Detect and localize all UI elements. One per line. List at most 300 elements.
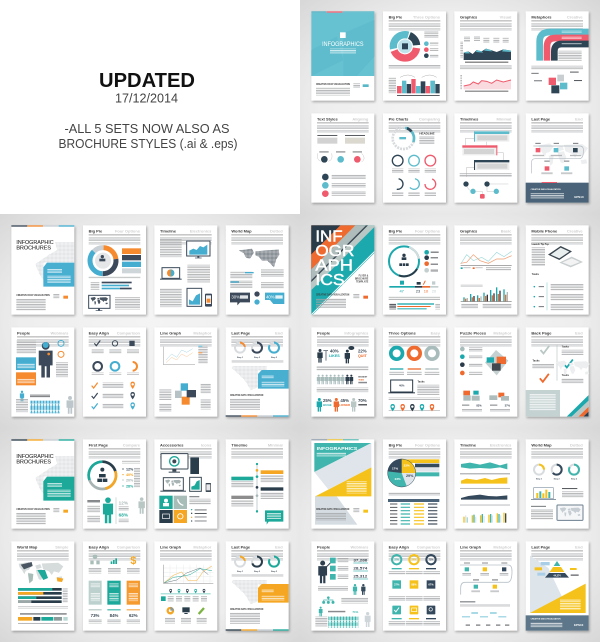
icon tiles <box>159 496 187 523</box>
page: Text Styles <box>311 113 375 204</box>
cover title: INFOGRAPHIC <box>16 240 54 246</box>
step labels: Step 1 <box>237 356 244 359</box>
page title: Line Graph <box>160 545 182 550</box>
background: white update panel <box>0 0 300 214</box>
center icons <box>254 291 260 305</box>
checks and pins <box>92 382 135 410</box>
cover footer heading: CREATIVE DATA VISUALIZATION <box>316 83 350 86</box>
segment bar with numbers: 10 <box>424 289 429 294</box>
page subtitle: End <box>275 331 283 336</box>
people rows: 71% <box>352 610 359 614</box>
page: cover diagonal Infographics: BROCHURE <box>355 278 369 280</box>
page subtitle: Comparing <box>419 117 441 122</box>
number stats <box>353 558 368 579</box>
faint map <box>557 361 590 376</box>
page: Big Pie <box>83 225 147 316</box>
puzzle <box>531 71 582 93</box>
page subtitle: Comparison <box>117 331 141 336</box>
page: Line Graph <box>154 541 218 632</box>
gray text box <box>526 390 560 417</box>
pie chart: 23% <box>395 477 401 481</box>
page subtitle: End <box>575 331 583 336</box>
page: Timeline <box>154 225 218 316</box>
puzzle group right <box>489 393 509 401</box>
tasks text: Tasks <box>417 380 425 384</box>
page title: World Map <box>17 545 38 550</box>
cover title: INFOGRAPHICS <box>322 41 364 48</box>
page title: Line Graph <box>160 331 182 336</box>
line chart <box>163 347 195 365</box>
page: Last Page <box>526 113 590 204</box>
page: Mobile Phone <box>526 225 590 316</box>
ring chart <box>384 241 424 282</box>
number legend: 40% <box>126 473 134 477</box>
page: Back Page <box>526 327 590 418</box>
stats: 83% <box>476 403 482 407</box>
top icons <box>92 340 139 354</box>
page: Line Graph <box>154 327 218 418</box>
data table <box>388 499 439 524</box>
percent stats: 73% <box>91 613 99 618</box>
figure with stats: 68% <box>119 513 129 518</box>
puzzle group left <box>463 391 480 401</box>
bar chart <box>463 513 506 523</box>
electronics devices <box>160 239 212 307</box>
segment bar with numbers: 47 <box>399 289 405 294</box>
line chart <box>460 75 511 92</box>
footer band: EPS10 <box>574 195 584 199</box>
color map <box>19 562 63 583</box>
step labels <box>232 570 283 577</box>
page subtitle: Minimal <box>496 117 511 122</box>
page title: Back Page <box>531 331 552 336</box>
pin row <box>389 404 440 411</box>
page subtitle: Metaphor <box>193 545 212 550</box>
page title: Graphics <box>460 229 478 234</box>
laptop <box>160 478 186 492</box>
curved metaphor bands <box>540 31 589 61</box>
cover footer: CREATIVE DATA VISUALIZATION <box>316 294 350 297</box>
bottom stripe <box>226 629 289 631</box>
blue callout 40%: 40% <box>266 294 275 299</box>
background shapes <box>530 556 586 613</box>
stat: likes: 40% <box>330 349 339 354</box>
ring chart <box>85 458 120 493</box>
biggest team label: TEAM <box>358 379 364 382</box>
donut chart <box>390 31 420 62</box>
page subtitle: Infographics <box>344 331 369 336</box>
cover title: ICS <box>315 272 345 289</box>
teal area chart <box>461 462 507 469</box>
page subtitle: Compare <box>123 443 141 448</box>
page title: People <box>17 331 31 336</box>
cover icon <box>340 32 346 38</box>
stat: likes <box>317 349 340 363</box>
page: Timeline <box>226 439 290 530</box>
page title: People <box>317 331 331 336</box>
footer text: CREATIVE DATA VISUALIZATION <box>16 294 50 297</box>
page title: Puzzle Pieces <box>460 331 487 336</box>
heading: UPDATED: UPDATED <box>99 70 195 92</box>
people row <box>16 391 73 414</box>
monitor map <box>89 295 110 311</box>
dotted map <box>232 366 267 390</box>
cluster bar chart <box>461 287 512 308</box>
blue stat box <box>16 357 36 370</box>
percent tiles: 67% <box>428 583 434 587</box>
page title: Last Page <box>231 545 251 550</box>
page: Easy Align <box>83 541 147 632</box>
isometric phones <box>548 246 583 267</box>
percentage rings: 28% <box>412 560 417 562</box>
page title: Mobile Phone <box>531 229 558 234</box>
text and list <box>189 496 211 522</box>
page subtitle: Four Options <box>115 229 141 234</box>
dotted map <box>232 580 267 604</box>
page: cover diagonal Infographics <box>311 225 377 318</box>
page: Big Pie <box>383 439 447 530</box>
page title: Easy Align <box>89 331 109 336</box>
set 5: teal, yellow and slate brochure pages <box>300 428 600 642</box>
footer band <box>526 182 589 203</box>
page subtitle: Webinars <box>50 331 69 336</box>
horizontal bars <box>91 282 132 290</box>
route timeline <box>531 143 583 175</box>
background map <box>538 143 588 166</box>
page subtitle: Easy <box>431 331 441 336</box>
text blocks <box>317 135 365 144</box>
page: Pie Charts <box>383 113 447 204</box>
page title: People <box>317 545 331 550</box>
date: 17/12/2014 <box>115 90 178 106</box>
legend <box>424 250 439 273</box>
page: Puzzle Pieces <box>454 327 518 418</box>
top icons: $ <box>130 555 136 567</box>
pie chart <box>388 459 416 487</box>
page subtitle: End <box>575 545 583 550</box>
text blocks <box>531 488 583 520</box>
long bars <box>389 303 440 309</box>
page title: Timelines <box>460 117 479 122</box>
set 3: teal, orange and navy brochure pages <box>300 214 600 428</box>
page title: Pie Charts <box>389 117 409 122</box>
page title: Big Pie <box>389 15 403 20</box>
monitor <box>161 454 188 473</box>
label bands <box>407 459 439 476</box>
page subtitle: Four Options <box>415 229 441 234</box>
step labels <box>232 356 283 363</box>
footer text: CREATIVE DATA VISUALIZATION <box>230 394 264 397</box>
geometric shapes <box>314 443 371 525</box>
bar chart <box>389 75 440 96</box>
page: Timeline <box>454 439 518 530</box>
tablet <box>190 477 201 491</box>
page subtitle: Creative <box>567 229 583 234</box>
page: Easy Align <box>383 541 447 632</box>
bottom icons <box>165 607 207 623</box>
pair of figures <box>318 584 365 595</box>
page: Last Page <box>526 541 590 632</box>
stats <box>462 403 511 411</box>
page: cover Infographic Brochures: BROCHURES <box>16 246 52 252</box>
page subtitle: Dotted <box>270 229 283 234</box>
page subtitle: Metaphor <box>493 545 512 550</box>
blue callout box <box>43 263 74 287</box>
page title: Last Page <box>231 331 251 336</box>
page subtitle: Metaphor <box>193 331 212 336</box>
people row <box>317 375 353 384</box>
page: Last Page <box>226 327 290 418</box>
legend <box>424 31 438 58</box>
percentage rings: 72% <box>429 560 434 562</box>
page subtitle: Four Options <box>415 443 441 448</box>
percentage rings: 37% <box>394 560 400 562</box>
step labels: Step 2 <box>254 356 261 359</box>
number stats: 37,286 <box>353 558 368 563</box>
stacked area chart <box>460 36 511 63</box>
cover title: INF <box>315 229 343 246</box>
set 2: orange, blue and navy brochure pages <box>0 214 300 428</box>
chart legend <box>198 346 208 364</box>
page: People <box>311 327 375 418</box>
puzzle <box>159 383 211 411</box>
cover title: INFOGRAPHIC <box>16 454 54 460</box>
number legend: 12% <box>126 467 134 471</box>
computer tower <box>190 457 199 474</box>
stat: quit: QUIT <box>358 354 367 358</box>
notice line 2: BROCHURE STYLES (.ai & .eps) <box>58 136 238 151</box>
percent stats: 84% <box>110 613 118 618</box>
line chart <box>461 251 512 265</box>
page title: Big Pie <box>389 229 403 234</box>
percentage rings <box>391 155 437 196</box>
task checks <box>532 345 583 383</box>
task checks: Tasks <box>532 359 540 363</box>
stat: quit: 22% <box>358 349 367 354</box>
callout text <box>560 599 581 610</box>
page subtitle: Webinars <box>350 545 369 550</box>
bottom labels <box>18 613 68 624</box>
option tags <box>122 248 141 273</box>
page title: Easy Align <box>389 545 409 550</box>
cover subtitle: FLYER & <box>359 275 369 277</box>
rings <box>92 362 139 375</box>
page: Timelines <box>454 113 518 204</box>
icon list <box>322 174 366 197</box>
page subtitle: Icons <box>201 443 212 448</box>
page title: Graphics <box>460 15 478 20</box>
page subtitle: Electronics <box>490 443 512 448</box>
step rings: Step 3 <box>571 478 578 481</box>
page title: Timeline <box>231 443 248 448</box>
laptop with bars <box>531 488 556 500</box>
segment bar with numbers <box>389 281 438 294</box>
figure with stats <box>87 497 145 524</box>
presenter figure <box>318 561 331 583</box>
page: Metaphors <box>526 11 590 102</box>
horizontal bars <box>18 588 68 603</box>
icon tiles <box>389 606 440 625</box>
donut chart <box>85 242 121 279</box>
page subtitle: Basic <box>501 229 512 234</box>
step rings: Step 2 <box>554 478 561 481</box>
page: cover Infographics <box>311 11 375 102</box>
launch text: Launch Tip-Top <box>532 244 549 246</box>
step rings <box>534 465 579 481</box>
dotted world map <box>35 456 74 495</box>
step labels: Step 3 <box>271 356 278 359</box>
icon list <box>460 347 482 375</box>
page title: World Map <box>531 443 552 448</box>
cover title: OGR <box>315 243 354 260</box>
page subtitle: Metaphor <box>493 331 512 336</box>
page: Line Graph <box>454 541 518 632</box>
page title: Timeline <box>160 229 177 234</box>
footer text: CREATIVE DATA VISUALIZATION <box>316 508 350 511</box>
footer text: CREATIVE DATA VISUALIZATION <box>16 508 50 511</box>
phone <box>206 483 211 492</box>
page title: Three Options <box>389 331 416 336</box>
corner stripes <box>567 395 589 417</box>
page title: First Page <box>89 443 109 448</box>
side icons <box>56 340 68 377</box>
page subtitle: Visual <box>500 15 511 20</box>
page title: Text Styles <box>317 117 339 122</box>
footer text: CREATIVE DATA VISUALIZATION <box>230 608 264 611</box>
page: Last Page <box>226 541 290 632</box>
page subtitle: Three Options <box>413 15 441 20</box>
bottom stats: LOWER <box>339 403 351 407</box>
page subtitle: End <box>275 545 283 550</box>
bottom stats: 25% <box>323 398 332 403</box>
amber callout <box>258 584 289 603</box>
page subtitle: Simple <box>55 545 69 550</box>
monitor map <box>557 505 583 520</box>
page: cover diagonal Infographics: TEMPLATE <box>356 280 369 283</box>
org tree <box>322 597 334 603</box>
page: cover Infographic Brochures: BROCHURES <box>16 460 52 466</box>
page subtitle: Dotted <box>570 443 583 448</box>
page subtitle: Creative <box>567 15 583 20</box>
page title: Timeline <box>460 443 477 448</box>
step rings <box>235 557 279 567</box>
number legend: 20% <box>126 478 134 482</box>
vertical timeline <box>231 463 283 513</box>
pie chart: 22% <box>404 464 410 468</box>
blue callout <box>258 370 289 389</box>
headline: HEADLINE <box>419 131 435 135</box>
bottom stats: HUGE <box>323 403 332 407</box>
node timeline <box>463 181 508 199</box>
pie chart: 17% <box>392 467 398 471</box>
route timeline <box>460 562 512 595</box>
page title: Line Graph <box>460 545 482 550</box>
page: First Page <box>83 439 147 530</box>
page: cover Infographic Brochures <box>11 225 75 316</box>
page title: Last Page <box>531 117 551 122</box>
page: World Map <box>11 541 75 632</box>
pin row <box>161 589 211 602</box>
update notice text block <box>58 70 238 151</box>
footer band: CREATIVE DATA VISUALIZATION <box>531 188 561 191</box>
biggest team label <box>358 376 368 383</box>
diagonal stripes <box>311 225 374 315</box>
percent tiles: 37% <box>394 583 400 587</box>
footer band <box>526 615 589 631</box>
page title: Metaphors <box>531 15 552 20</box>
page subtitle: Minimal <box>268 443 283 448</box>
page title: Big Pie <box>389 443 403 448</box>
page subtitle: Electronics <box>190 229 212 234</box>
dotted world map <box>35 242 74 281</box>
number stats: 28,574 <box>353 566 368 571</box>
percent tiles: 88% <box>411 583 417 587</box>
page: World Map <box>226 225 290 316</box>
segment bar with numbers: 20 <box>432 289 437 294</box>
page subtitle: End <box>575 117 583 122</box>
notice line 1: -ALL 5 SETS NOW ALSO AS <box>64 121 230 136</box>
page: cover geometric Infographics <box>311 439 375 530</box>
bottom stripe <box>226 415 289 417</box>
page: cover Infographic Brochures <box>11 439 75 530</box>
chart legend <box>461 267 511 271</box>
segment bar with numbers: 23 <box>416 289 421 294</box>
three linked icons <box>317 151 364 163</box>
cover title: INFOGRAPHICS <box>317 446 358 452</box>
step labels: Step 1 <box>237 570 244 573</box>
page subtitle: Comparison <box>117 545 141 550</box>
orange stat box <box>16 372 36 385</box>
page: Graphics <box>454 225 518 316</box>
page title: World Map <box>231 229 252 234</box>
number legend: 28% <box>126 484 134 488</box>
page: People <box>311 541 375 632</box>
number stats: 25,312 <box>353 574 368 579</box>
page: Big Pie <box>383 11 447 102</box>
checkbox list <box>330 558 348 580</box>
stat: quit <box>345 346 367 363</box>
set 1: teal, red and navy brochure pages <box>300 0 600 214</box>
biggest team label: BIGGEST <box>358 376 368 378</box>
percent columns <box>89 581 140 605</box>
percent stats <box>89 609 140 623</box>
page: Easy Align <box>83 327 147 418</box>
stats: 37% <box>505 403 511 407</box>
footer band: CREATIVE DATA VISUALIZATION <box>531 618 561 621</box>
page: People <box>11 327 75 418</box>
percent tiles <box>389 580 440 601</box>
bottom stats: 70% <box>358 398 367 403</box>
central figure <box>39 342 53 378</box>
stacked timeline boxes <box>462 131 509 177</box>
bottom stats: 45% <box>340 398 349 403</box>
bottom tree <box>460 601 510 626</box>
dashed radial chart <box>390 125 417 152</box>
navy callout 30%: 30% <box>231 295 240 300</box>
cover title: APH <box>315 258 353 275</box>
teal callout box <box>43 477 74 501</box>
tasks list: Tasks <box>532 272 540 276</box>
pie chart: 29% <box>406 474 414 478</box>
page title: Big Pie <box>89 229 103 234</box>
page: Graphics <box>454 11 518 102</box>
bottom stats <box>317 398 367 412</box>
page: Three Options <box>383 327 447 418</box>
task checks: Tasks <box>562 345 570 349</box>
page: Accessories <box>154 439 218 530</box>
page title: Last Page <box>531 545 551 550</box>
step labels: Step 2 <box>254 570 261 573</box>
